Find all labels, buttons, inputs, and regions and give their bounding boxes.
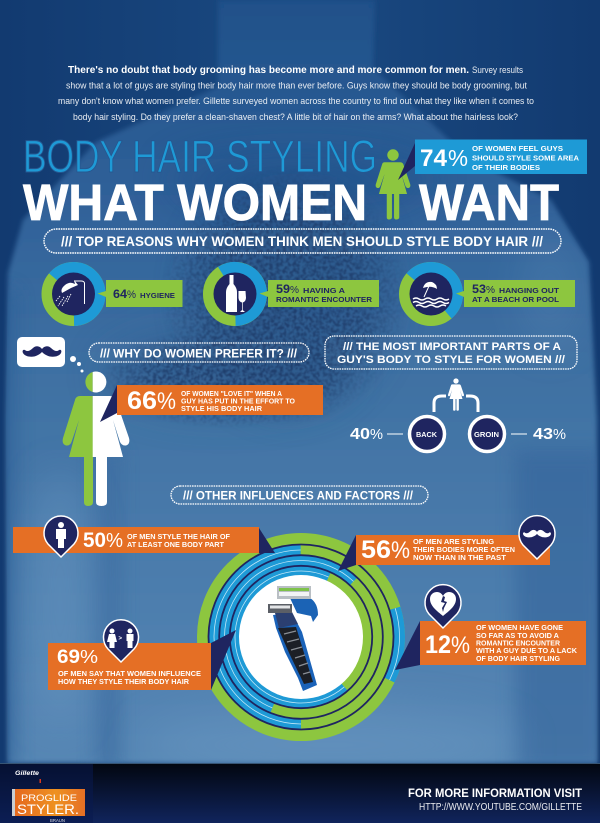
reason: romantic encounter	[198, 257, 379, 331]
heading pill: most important parts: GUY'S BODY TO STYLE FOR WOMEN ///	[337, 354, 565, 366]
callout: 66 percent: 66	[127, 387, 157, 415]
logo: gillette proglide styler: BRAUN	[50, 818, 65, 823]
diagram: back vs groin	[350, 378, 566, 452]
heading pill: most important parts: /// THE MOST IMPORTANT PARTS OF A	[343, 341, 561, 353]
callout: 50 percent	[13, 516, 275, 557]
icon: pin with mustache	[519, 516, 555, 559]
callout: 74 percent	[398, 140, 587, 180]
callout: 50 percent: 50	[83, 529, 106, 552]
callout: 69 percent: 69	[57, 647, 80, 668]
icon: green woman	[376, 149, 410, 219]
callout: 74 percent: OF WOMEN FEEL GUYS	[472, 146, 563, 153]
callout: 12 percent: SO FAR AS TO AVOID A	[476, 633, 559, 640]
heading pill: top reasons: /// TOP REASONS WHY WOMEN THINK MEN SHOULD STYLE BODY HAIR ///	[61, 234, 543, 249]
intro paragraph: show that a lot of guys are styling their body hair more than ever before. Guys know they should be body grooming, but	[66, 80, 527, 92]
callout: 12 percent: OF BODY HAIR STYLING	[476, 656, 561, 663]
chart: concentric percentage rings	[178, 514, 424, 760]
thought bubble: mustache	[17, 337, 84, 372]
callout: 74 percent: 74	[420, 145, 448, 172]
intro paragraph: many don't know what women prefer. Gillette surveyed women across the country to find out what they like when it comes to	[58, 96, 534, 107]
heading pill: why do women prefer it	[89, 343, 309, 362]
callout: 66 percent: OF WOMEN "LOVE IT" WHEN A	[181, 391, 282, 398]
diagram: back vs groin: 43	[533, 426, 553, 443]
intro paragraph: There's no doubt that body grooming has become more and more common for men.	[68, 65, 469, 76]
reason: romantic encounter: HAVING A	[303, 288, 345, 295]
intro paragraph	[58, 65, 534, 123]
diagram: back vs groin: GROIN	[474, 432, 499, 439]
footer band	[0, 763, 600, 823]
reason: beach or pool: %	[486, 284, 495, 296]
heading pill: other influences	[171, 486, 428, 504]
logo: gillette proglide styler: STYLER.	[17, 801, 79, 817]
callout: 56 percent	[338, 516, 555, 571]
reason: hygiene: 64	[113, 287, 127, 301]
logo: gillette proglide styler	[12, 770, 85, 823]
heading pill: why do women prefer it: /// WHY DO WOMEN PREFER IT? ///	[100, 348, 298, 360]
heading pill: other influences: /// OTHER INFLUENCES AND FACTORS ///	[183, 490, 414, 502]
callout: 74 percent: %	[448, 145, 468, 171]
reason: hygiene: HYGIENE	[140, 293, 175, 300]
call to action: more information	[408, 786, 583, 813]
callout: 66 percent: STYLE HIS BODY HAIR	[181, 406, 262, 413]
callout: 69 percent	[48, 620, 236, 690]
callout: 56 percent: OF MEN ARE STYLING	[413, 539, 495, 546]
intro paragraph: body hair styling. Do they prefer a clean-shaven chest? A little bit of hair on the arms? What about the hairless look?	[73, 112, 518, 123]
callout: 69 percent: %	[80, 647, 98, 667]
diagram: back vs groin: 40	[350, 426, 370, 443]
callout: 66 percent: %	[157, 388, 176, 415]
callout: 50 percent: AT LEAST ONE BODY PART	[127, 540, 225, 549]
reason: romantic encounter: 59	[276, 284, 290, 296]
product: razor	[268, 586, 318, 691]
callout: 66 percent	[100, 385, 323, 422]
callout: 74 percent: SHOULD STYLE SOME AREA	[472, 155, 579, 162]
call to action: more information: FOR MORE INFORMATION VISIT	[408, 786, 583, 800]
diagram: back vs groin: BACK	[416, 432, 437, 439]
reason: beach or pool	[394, 257, 575, 331]
icon: small woman	[448, 378, 464, 411]
reason: hygiene	[36, 257, 182, 331]
callout: 12 percent: ROMANTIC ENCOUNTER	[476, 640, 560, 648]
icon: pin with woman and man: >	[118, 636, 122, 642]
title: body hair styling: BODY HAIR STYLING	[23, 131, 377, 182]
intro paragraph: Survey results	[472, 65, 523, 76]
reason: beach or pool: HANGING OUT	[499, 288, 560, 295]
callout: 12 percent: %	[451, 632, 470, 659]
callout: 69 percent: OF MEN SAY THAT WOMEN INFLUENCE	[58, 671, 201, 678]
title: what women want	[23, 174, 559, 231]
callout: 56 percent: 56	[361, 536, 391, 564]
title: what women want: WHAT WOMEN	[23, 174, 367, 231]
callout: 69 percent: HOW THEY STYLE THEIR BODY HAIR	[58, 679, 189, 686]
icon: umbrella and waves	[413, 282, 449, 307]
callout: 66 percent: GUY HAS PUT IN THE EFFORT TO	[181, 398, 296, 406]
callout: 12 percent: OF WOMEN HAVE GONE	[476, 625, 563, 632]
callout: 56 percent: THEIR BODIES MORE OFTEN	[413, 547, 515, 554]
logo: gillette proglide styler: PROGLIDE	[21, 793, 77, 804]
title: what women want: WANT	[419, 174, 559, 231]
reason: romantic encounter: ROMANTIC ENCOUNTER	[276, 297, 372, 304]
icon: wine bottle and glass	[226, 275, 246, 312]
icon: shower	[56, 280, 84, 306]
reason: romantic encounter: %	[290, 284, 299, 296]
icon: pin with man	[44, 516, 78, 557]
icon: half green half white woman	[63, 372, 129, 506]
reason: beach or pool: AT A BEACH OR POOL	[472, 297, 560, 304]
callout: 74 percent: OF THEIR BODIES	[472, 165, 540, 172]
heading pill: most important parts	[325, 336, 577, 369]
diagram: back vs groin: %	[553, 426, 566, 443]
call to action: more information: HTTP://WWW.YOUTUBE.COM/GILLETTE	[419, 802, 582, 813]
callout: 56 percent: %	[391, 537, 410, 564]
callout: 12 percent: WITH A GUY DUE TO A LACK	[476, 648, 577, 655]
heading pill: top reasons	[44, 229, 561, 253]
callout: 12 percent: 12	[425, 631, 451, 659]
callout: 12 percent	[395, 585, 586, 670]
icon: pin with broken heart	[425, 585, 461, 628]
icon: pin with woman and man	[104, 620, 138, 662]
reason: beach or pool: 53	[472, 284, 486, 296]
reason: hygiene: %	[127, 289, 136, 301]
logo: gillette proglide styler: Gillette	[15, 770, 39, 777]
callout: 56 percent: NOW THAN IN THE PAST	[413, 555, 507, 562]
callout: 50 percent: %	[106, 530, 123, 552]
callout: 50 percent: OF MEN STYLE THE HAIR OF	[127, 532, 231, 541]
diagram: back vs groin: %	[370, 426, 383, 443]
